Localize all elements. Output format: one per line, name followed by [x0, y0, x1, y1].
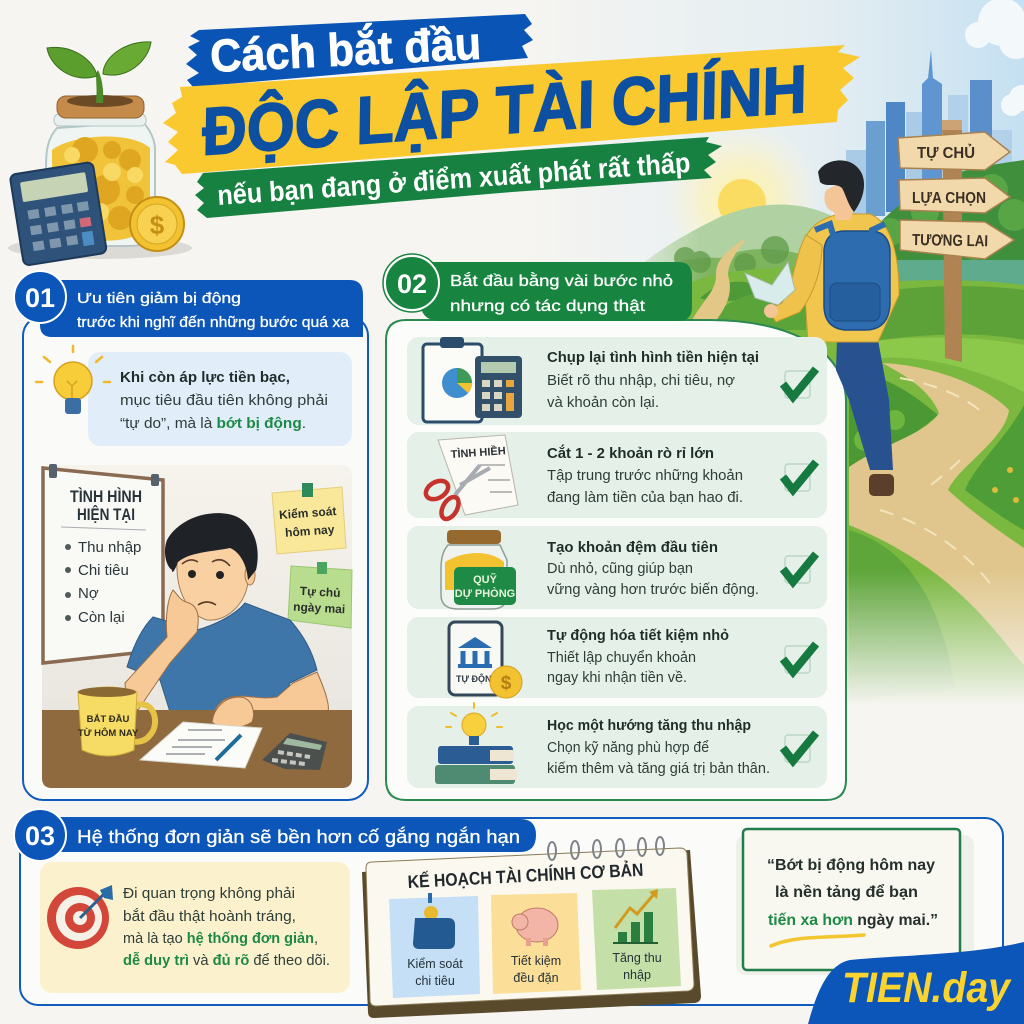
- yellow brush: ĐỘC LẬP TÀI CHÍNH: ĐỘC LẬP TÀI CHÍNH: [202, 52, 807, 170]
- callout: passive less: Khi còn áp lực tiền bạc,: [120, 370, 290, 386]
- sticky note: yellow: Kiểm soát: [279, 504, 337, 522]
- callout: passive less: mục tiêu đầu tiên không phải: [120, 393, 328, 409]
- sign: TỰ CHỦ: [898, 132, 1010, 170]
- mug: [78, 687, 155, 756]
- icon: tablet with bank: TỰ ĐỘNG: [456, 673, 498, 684]
- quote card: là nền tảng để bạn: [775, 883, 918, 901]
- step 1: và khoản còn lại.: [547, 395, 659, 411]
- callout: passive less: “tự do”, mà là bớt bị động .: [120, 416, 306, 432]
- panel 02 background: [386, 320, 846, 800]
- icon: light bulb: [36, 346, 110, 414]
- step 3: vững vàng hơn trước biến động.: [547, 582, 759, 598]
- step 1: Chụp lại tình hình tiền hiện tại: [547, 350, 759, 366]
- callout: simple system: Đi quan trọng không phải: [123, 886, 295, 902]
- icon: emergency fund jar: [441, 530, 516, 609]
- icon: receipt and scissors: TÌNH HIỀH: [450, 444, 506, 461]
- notebook: basic financial plan: [362, 837, 701, 1018]
- whiteboard: [43, 464, 163, 663]
- step 2: Cắt 1 - 2 khoản rò rỉ lớn: [547, 444, 714, 462]
- card: spending control: chi tiêu: [415, 974, 455, 988]
- sign: TỰ CHỦ: TỰ CHỦ: [917, 143, 975, 162]
- sign: TƯƠNG LAI: TƯƠNG LAI: [912, 232, 988, 250]
- quote card: “Bớt bị động hôm nay: [767, 857, 935, 874]
- stressed man: [125, 513, 328, 722]
- title banner: [163, 14, 860, 218]
- sign: TƯƠNG LAI: [900, 220, 1014, 259]
- calculator on desk: [262, 733, 327, 770]
- icon: dollar coin: $: [150, 210, 165, 240]
- step 5: [407, 703, 827, 788]
- card: raise income: Tăng thu: [612, 951, 662, 965]
- step 4: ngay khi nhận tiền về.: [547, 670, 687, 686]
- document and pen: [140, 722, 262, 768]
- callout: simple system: bắt đầu thật hoành tráng,: [123, 908, 296, 925]
- whiteboard: Thu nhập: [78, 539, 141, 556]
- step 1: [407, 337, 827, 425]
- check: [783, 554, 816, 583]
- callout: simple system: mà là tạo hệ thống đơn giản,: [123, 931, 318, 947]
- panel 01 header: 01: [25, 283, 55, 313]
- mug: TỪ HÔM NAY: [78, 727, 139, 739]
- step 3: Dù nhỏ, cũng giúp bạn: [547, 561, 693, 577]
- panel: 01 priority: [14, 271, 368, 800]
- sticky note: yellow: hôm nay: [285, 522, 335, 540]
- step 4: Tự động hóa tiết kiệm nhỏ: [547, 628, 729, 644]
- sticky note: green: Tự chủ: [300, 584, 341, 600]
- notebook: basic financial plan: KẾ HOẠCH TÀI CHÍNH CƠ BẢN: [407, 859, 644, 892]
- card: spending control: Kiểm soát: [407, 957, 463, 971]
- card: raise income: [592, 888, 681, 990]
- illustration: signpost: [898, 120, 1014, 362]
- card: regular saving: [491, 893, 581, 994]
- icon: tablet with bank: $: [501, 673, 512, 694]
- whiteboard: HIỆN TẠI: [77, 505, 135, 524]
- panel: 02 steps: [383, 254, 827, 788]
- green brush: subtitle: nếu bạn đang ở điểm xuất phát rất thấp: [216, 147, 691, 211]
- mug: BẮT ĐẦU: [87, 714, 130, 725]
- icon: clipboard and calculator: [423, 337, 522, 422]
- panel 01 header: Ưu tiên giảm bị động: [77, 290, 241, 307]
- whiteboard: Còn lại: [78, 609, 125, 626]
- step 5: Chọn kỹ năng phù hợp để: [547, 740, 709, 756]
- icon: calculator: [10, 162, 107, 266]
- quote card: tiến xa hơn ngày mai.”: [768, 912, 938, 929]
- sign: LỰA CHỌN: [899, 178, 1010, 213]
- desk: [42, 710, 352, 788]
- step 2: đang làm tiền của bạn hao đi.: [547, 490, 743, 506]
- quote card: [736, 829, 974, 975]
- blue brush: Cách bắt đầu: Cách bắt đầu: [209, 17, 482, 82]
- illustration: man with backpack: [745, 160, 899, 496]
- logo: TIEN.day: TIEN.day: [842, 964, 1012, 1012]
- whiteboard: TÌNH HÌNH: [70, 487, 142, 506]
- icon: target with dart: [47, 885, 113, 949]
- hand on desk: [212, 697, 254, 728]
- step 4: [407, 617, 827, 698]
- illustration: landscape with city and path: [520, 0, 1024, 706]
- whiteboard: Nợ: [78, 585, 99, 602]
- icon: emergency fund jar: DỰ PHÒNG: [455, 587, 515, 600]
- check: [783, 462, 816, 491]
- panel 02 header: [383, 254, 692, 321]
- panel 02 header: 02: [397, 269, 427, 299]
- panel 02 header: nhưng có tác dụng thật: [450, 298, 646, 315]
- panel 01 header: [14, 271, 363, 337]
- callout: simple system: dễ duy trì và đủ rõ để theo dõi.: [123, 952, 330, 969]
- icon: dollar coin: [130, 197, 184, 251]
- icon: coin jar with plant: [8, 42, 192, 266]
- card: raise income: nhập: [623, 968, 651, 982]
- step 4: Thiết lập chuyển khoản: [547, 650, 696, 666]
- step 1: Biết rõ thu nhập, chi tiêu, nợ: [547, 373, 735, 389]
- panel 02 header: Bắt đầu bằng vài bước nhỏ: [450, 271, 673, 290]
- illustration: stressed man at desk: [42, 464, 352, 788]
- icon: tablet with bank: [449, 622, 522, 698]
- step 2: [407, 432, 827, 522]
- icon: map: [745, 262, 795, 305]
- card: regular saving: Tiết kiệm: [511, 954, 561, 968]
- icon: emergency fund jar: QUỸ: [473, 573, 498, 586]
- check: [783, 369, 816, 398]
- whiteboard: Chi tiêu: [78, 562, 129, 579]
- callout: passive less: [88, 352, 352, 446]
- panel 03 frame: [20, 818, 1003, 1005]
- sticky note: yellow: [272, 483, 346, 554]
- panel 03 header: 03: [25, 821, 55, 851]
- panel 03 header: [14, 809, 536, 861]
- icon: backpack: [815, 224, 890, 330]
- card: spending control: [389, 893, 480, 998]
- step 3: [407, 526, 827, 609]
- check: [783, 644, 816, 673]
- panel 01 header: trước khi nghĩ đến những bước quá xa: [77, 314, 350, 331]
- step 2: Tập trung trước những khoản: [547, 468, 743, 484]
- callout: simple system: [40, 862, 350, 993]
- sign: LỰA CHỌN: LỰA CHỌN: [912, 190, 986, 207]
- icon: receipt and scissors: [423, 435, 518, 522]
- panel: 03 system: [14, 809, 1003, 1018]
- card: regular saving: đều đặn: [513, 971, 559, 985]
- step 3: Tạo khoản đệm đầu tiên: [547, 540, 718, 556]
- panel 03 header: Hệ thống đơn giản sẽ bền hơn cố gắng ngắn hạn: [77, 826, 520, 847]
- step 5: Học một hướng tăng thu nhập: [547, 718, 751, 734]
- sticky note: green: [288, 562, 352, 628]
- check: [783, 733, 816, 762]
- sticky note: green: ngày mai: [293, 600, 346, 616]
- logo: TIEN.day: [808, 942, 1024, 1024]
- icon: books and bulb: [435, 703, 517, 784]
- panel 01 frame: [23, 316, 368, 800]
- step 5: kiếm thêm và tăng giá trị bản thân.: [547, 761, 770, 777]
